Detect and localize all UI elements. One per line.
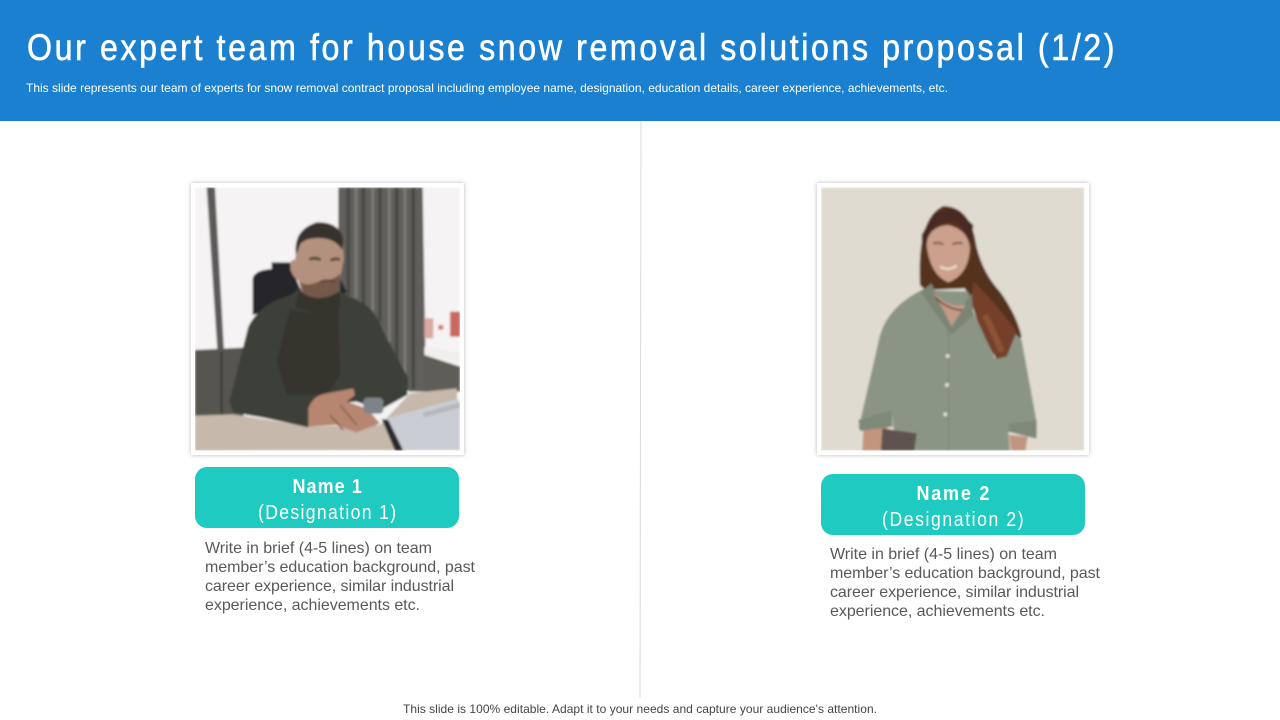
name badge 2 <box>821 474 1085 535</box>
description 2: member’s education background, past <box>830 565 1101 582</box>
description 1 <box>205 540 476 614</box>
description 2: Write in brief (4-5 lines) on team <box>830 546 1057 563</box>
name badge 2: Name 2 <box>916 483 989 505</box>
description 2: career experience, similar industrial <box>830 584 1079 601</box>
photo: woman in green shirt <box>821 187 1084 451</box>
photo: man at desk <box>195 187 460 451</box>
description 1: member’s education background, past <box>205 559 476 576</box>
header band <box>0 0 1280 121</box>
description 2 <box>830 546 1101 620</box>
description 2: experience, achievements etc. <box>830 603 1045 620</box>
photo frame 1 <box>191 183 464 455</box>
panel: team member 2 <box>817 183 1101 620</box>
description 1: career experience, similar industrial <box>205 578 454 595</box>
name badge 1: Name 1 <box>292 476 362 498</box>
name badge 2: (Designation 2) <box>882 508 1024 530</box>
title: Our expert team for house snow removal solutions proposal (1/2) <box>27 28 1115 69</box>
description 1: experience, achievements etc. <box>205 597 420 614</box>
panel: team member 1 <box>191 183 476 614</box>
name badge 1 <box>195 467 459 528</box>
footer note: This slide is 100% editable. Adapt it to your needs and capture your audience's attention. <box>403 702 877 716</box>
name badge 1: (Designation 1) <box>258 501 396 523</box>
photo frame 2 <box>817 183 1089 455</box>
center divider <box>640 121 641 698</box>
subtitle: This slide represents our team of experts for snow removal contract proposal including employee name, designation, education details, career experience, achievements, etc. <box>26 81 948 95</box>
description 1: Write in brief (4-5 lines) on team <box>205 540 432 557</box>
